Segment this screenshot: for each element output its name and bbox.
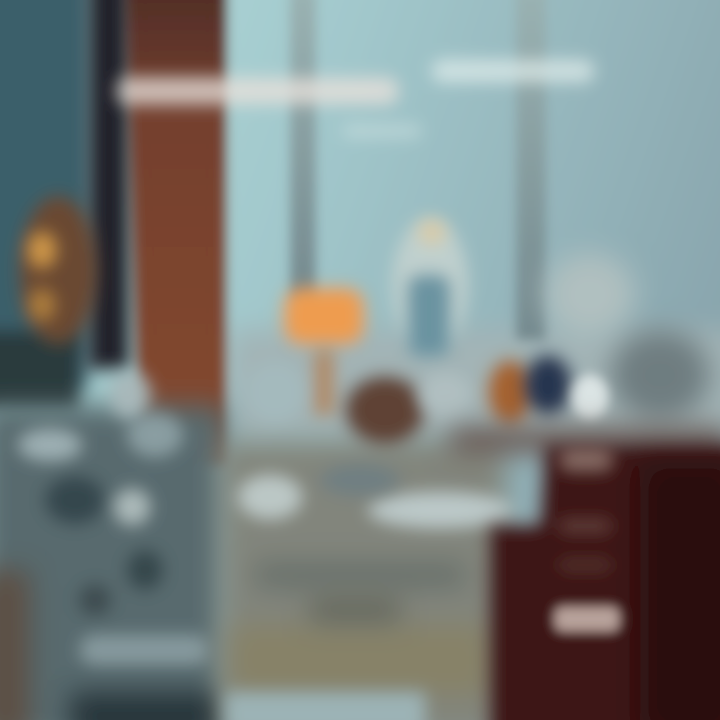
- desk surface and clutter, left: [0, 371, 230, 720]
- blurred title bars: [118, 60, 594, 138]
- dresser drawer handles: [554, 450, 620, 632]
- distant tower: [392, 219, 468, 357]
- distant pale buildings: [545, 253, 635, 337]
- orange lamp: [284, 288, 364, 415]
- dark wooden dresser: [490, 445, 720, 720]
- desk surface and papers, center: [220, 440, 512, 720]
- objects on the ledge: [245, 330, 720, 452]
- left wall lamp: [20, 196, 96, 344]
- left teal wall: [0, 0, 88, 410]
- dark edge and wooden column: [88, 0, 226, 465]
- window columns: [290, 0, 546, 340]
